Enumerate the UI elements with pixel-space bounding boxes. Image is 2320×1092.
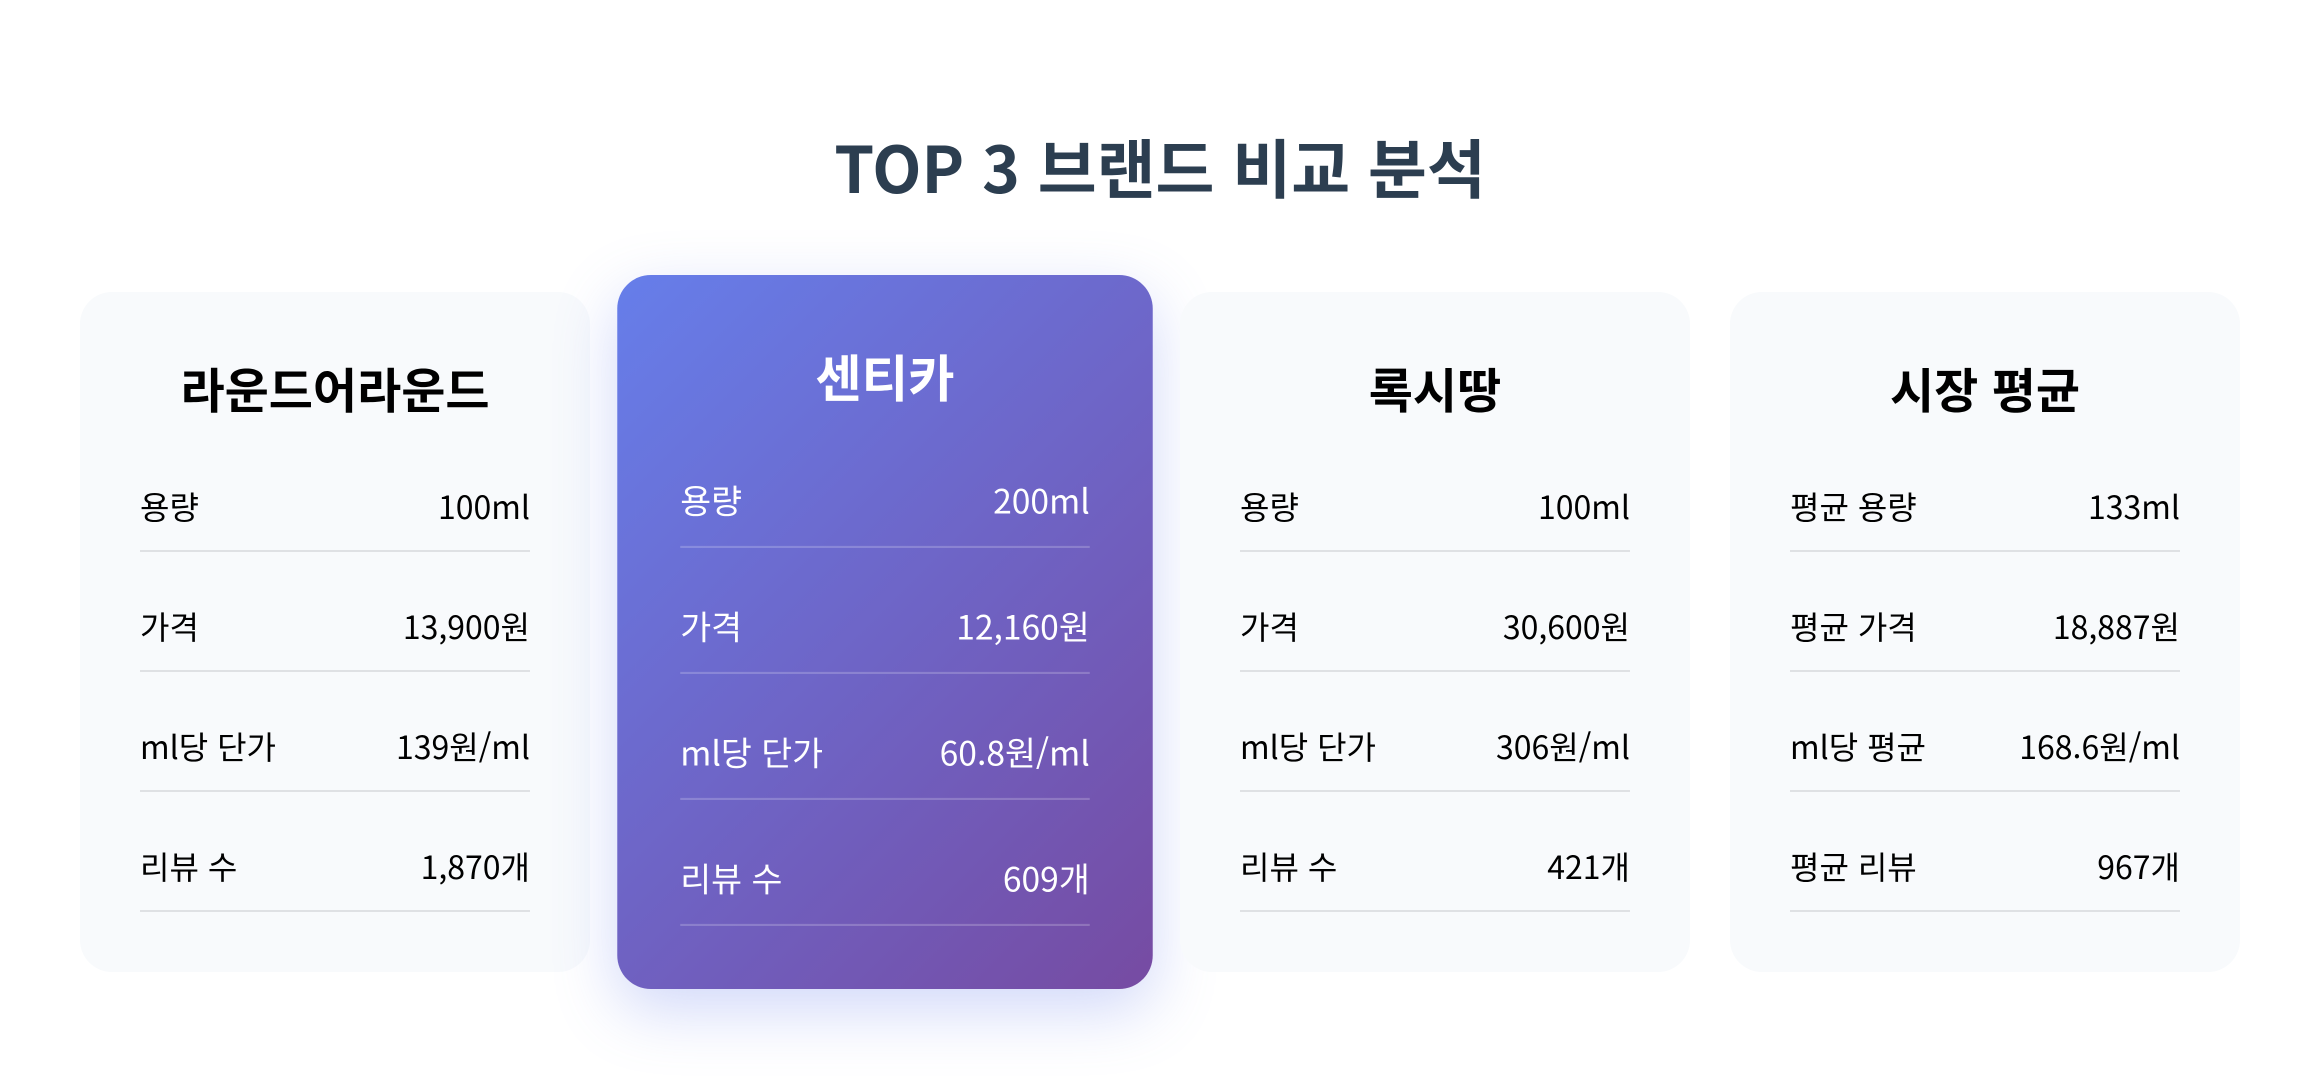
row: 용량: 100ml: [438, 482, 530, 528]
row: 용량: 100ml: [1538, 482, 1630, 528]
row: 리뷰 수: 1,870개: [421, 842, 530, 888]
row: 평균 용량: [1790, 462, 2180, 552]
row: ml당 단가: 306원/ml: [1496, 722, 1630, 768]
row: ml당 단가: 139원/ml: [396, 722, 530, 768]
row: 평균 가격: [1790, 582, 2180, 672]
row: ml당 단가: ml당 단가: [1240, 722, 1376, 768]
row: ml당 단가: [1240, 702, 1630, 792]
row: ml당 평균: [1790, 702, 2180, 792]
row: 평균 가격: 평균 가격: [1790, 602, 1917, 648]
row: 용량: 용량: [140, 482, 199, 528]
row: 리뷰 수: 리뷰 수: [140, 842, 237, 888]
row: 리뷰 수: 리뷰 수: [680, 853, 782, 901]
row: 리뷰 수: 609개: [1003, 853, 1090, 901]
row: ml당 평균: ml당 평균: [1790, 722, 1926, 768]
row: 용량: [140, 462, 530, 552]
panel: 록시땅: [1180, 292, 1690, 972]
row: 가격: [680, 579, 1090, 673]
row: 용량: [1240, 462, 1630, 552]
row: 가격: 13,900원: [403, 602, 530, 648]
row: 평균 리뷰: [1790, 822, 2180, 912]
row: 평균 용량: 평균 용량: [1790, 482, 1917, 528]
row: 용량: [680, 453, 1090, 547]
row: 용량: 용량: [680, 475, 742, 523]
row: 평균 리뷰: 967개: [2097, 842, 2180, 888]
row: 가격: 12,160원: [956, 601, 1090, 649]
row: ml당 단가: [680, 705, 1090, 799]
row: 평균 용량: 133ml: [2088, 482, 2180, 528]
row: ml당 평균: 168.6원/ml: [2019, 722, 2180, 768]
heading: 라운드어라운드: 라운드어라운드: [180, 352, 490, 422]
row: 리뷰 수: [140, 822, 530, 912]
heading: 시장 평균: 시장 평균: [1890, 352, 2080, 422]
row: 가격: [140, 582, 530, 672]
row: ml당 단가: 60.8원/ml: [940, 727, 1090, 775]
row: 평균 리뷰: 평균 리뷰: [1790, 842, 1917, 888]
heading: 센티카: 센티카: [815, 337, 955, 411]
row: 리뷰 수: [1240, 822, 1630, 912]
row: ml당 단가: [140, 702, 530, 792]
row: 평균 가격: 18,887원: [2053, 602, 2180, 648]
panel: 시장 평균: [1730, 292, 2240, 972]
row: 리뷰 수: 421개: [1547, 842, 1630, 888]
row: ml당 단가: ml당 단가: [680, 727, 823, 775]
row: ml당 단가: ml당 단가: [140, 722, 276, 768]
row: 용량: 200ml: [993, 475, 1090, 523]
row: 리뷰 수: [680, 831, 1090, 925]
row: 용량: 용량: [1240, 482, 1299, 528]
panel: 라운드어라운드: [80, 292, 590, 972]
row: 가격: 30,600원: [1503, 602, 1630, 648]
panel: 센티카 (highlighted): [617, 275, 1153, 989]
heading: 록시땅: 록시땅: [1369, 352, 1501, 422]
row: 가격: 가격: [680, 601, 742, 649]
title: TOP 3 브랜드 비교 분석: [834, 120, 1486, 212]
row: 가격: [1240, 582, 1630, 672]
row: 가격: 가격: [1240, 602, 1299, 648]
row: 리뷰 수: 리뷰 수: [1240, 842, 1337, 888]
row: 가격: 가격: [140, 602, 199, 648]
